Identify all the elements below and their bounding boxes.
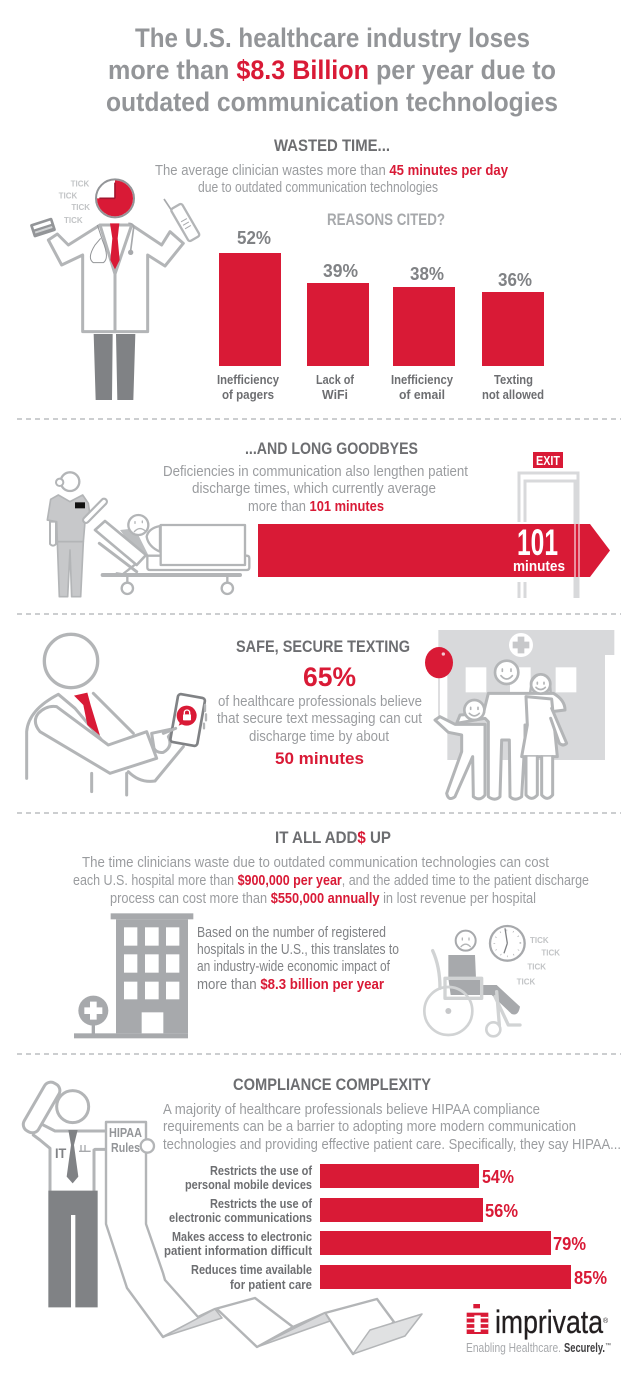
text block: wasted time intro: The average clinician wastes more than 45 minutes per day <box>155 162 509 179</box>
text block: secure messaging: that secure text messaging can cut <box>217 710 423 727</box>
bar chart: reasons cited: Lack of <box>316 373 355 387</box>
title: more than $8.3 Billion per year due to <box>108 55 556 85</box>
bar chart: reasons cited: 36% <box>498 270 532 290</box>
text block: industry-wide impact <box>197 925 399 993</box>
icon: folded hipaa rules paper <box>106 1122 422 1354</box>
text block: secure messaging <box>217 693 423 768</box>
bar chart: reasons cited: 39% <box>323 261 358 281</box>
panel: safe secure texting <box>27 630 614 799</box>
bar chart: reasons cited <box>217 228 544 402</box>
logo: imprivata: ™ <box>605 1342 611 1349</box>
bar chart: reasons cited: of pagers <box>222 388 274 402</box>
logo: imprivata: Enabling Healthcare. <box>466 1340 561 1355</box>
logo: imprivata: imprivata <box>495 1304 603 1340</box>
text block: industry-wide impact: Based on the number of registered <box>197 925 386 941</box>
bar chart: reasons cited: Texting <box>494 373 533 387</box>
title <box>106 23 558 117</box>
icon: folded hipaa rules paper: Rules <box>111 1140 140 1155</box>
text block: hospital costs <box>73 854 589 907</box>
text block: wasted time intro: due to outdated communication technologies <box>198 179 438 196</box>
icon: doctor with clock head <box>30 179 200 400</box>
bar chart: hipaa effects: for patient care <box>230 1278 312 1292</box>
bar chart: hipaa effects: electronic communications <box>169 1211 312 1225</box>
text block: discharge times: more than 101 minutes <box>248 498 384 515</box>
heading: wasted time: WASTED TIME... <box>274 136 390 155</box>
icon: doctor with clock head: TICK <box>71 179 90 188</box>
heading: reasons cited: REASONS CITED? <box>327 210 445 229</box>
text block: discharge times: discharge times, which currently average <box>192 480 436 497</box>
bar chart: reasons cited: Inefficiency <box>217 373 279 387</box>
logo: imprivata: Securely. <box>564 1340 605 1355</box>
text block: secure messaging: 50 minutes <box>275 749 364 768</box>
text block: industry-wide impact: hospitals in the U.S., this translates to <box>197 942 399 958</box>
text block: hospital costs: process can cost more than $550,000 annually in lost revenue per hospital <box>110 890 536 907</box>
text block: hipaa barrier <box>163 1101 621 1153</box>
icon: hospital building <box>74 913 193 1038</box>
text block: discharge times: Deficiencies in communication also lengthen patient <box>163 463 469 480</box>
icon: exit door <box>519 452 578 598</box>
stat: 65%: 65% <box>303 662 356 692</box>
icon: doctor with clock head: TICK <box>59 191 78 200</box>
text block: discharge times <box>163 463 469 515</box>
panel: it all adds up <box>73 828 589 1038</box>
bar chart: reasons cited: Inefficiency <box>391 373 453 387</box>
text block: secure messaging: of healthcare professionals believe <box>218 693 422 710</box>
text block: hospital costs: The time clinicians waste due to outdated communication technologies can cost <box>82 854 550 871</box>
bar chart: reasons cited: of email <box>399 388 445 402</box>
arrow: 101 minutes <box>258 522 610 577</box>
text block: wasted time intro <box>155 162 509 196</box>
bar chart: hipaa effects: Makes access to electronic <box>172 1230 312 1244</box>
title: outdated communication technologies <box>106 87 558 117</box>
icon: patient waiting in wheelchair <box>424 926 560 1036</box>
heading: compliance complexity: COMPLIANCE COMPLEXITY <box>233 1075 432 1094</box>
bar chart: hipaa effects: 56% <box>485 1201 518 1221</box>
logo: imprivata <box>466 1304 611 1355</box>
text block: secure messaging: discharge time by about <box>249 728 390 745</box>
icon: clinician using secure phone <box>27 634 206 795</box>
icon: IT worker scratching head: IT <box>55 1145 67 1161</box>
icon: patient waiting in wheelchair: TICK <box>517 977 536 986</box>
bar chart: hipaa effects <box>164 1164 607 1292</box>
text block: hospital costs: each U.S. hospital more than $900,000 per year, and the added time to the patient discharge <box>73 872 589 889</box>
text block: hipaa barrier: A majority of healthcare professionals believe HIPAA compliance <box>163 1101 540 1118</box>
icon: exit door: EXIT <box>536 454 560 468</box>
icon: folded hipaa rules paper: HIPAA <box>109 1125 143 1140</box>
text block: hipaa barrier: requirements can be a barrier to adopting more modern communication <box>163 1118 576 1135</box>
icon: patient waiting in wheelchair: TICK <box>541 949 560 958</box>
icon: IT worker scratching head <box>21 1079 154 1307</box>
bar chart: hipaa effects: Reduces time available <box>191 1263 312 1277</box>
bar chart: hipaa effects: 79% <box>553 1234 586 1254</box>
icon: logo mark <box>467 1304 488 1334</box>
panel: wasted time <box>30 136 544 402</box>
bar chart: hipaa effects: Restricts the use of <box>210 1164 313 1178</box>
bar chart: hipaa effects: personal mobile devices <box>185 1178 312 1192</box>
bar chart: hipaa effects: 54% <box>482 1167 514 1187</box>
icon: patient waiting in wheelchair: TICK <box>530 936 549 945</box>
panel: compliance complexity <box>21 1075 621 1354</box>
text block: industry-wide impact: more than $8.3 billion per year <box>197 977 384 993</box>
bar chart: reasons cited: 38% <box>410 264 444 284</box>
heading: it all adds up: IT ALL ADD$ UP <box>275 828 391 847</box>
title: The U.S. healthcare industry loses <box>135 23 530 53</box>
bar chart: hipaa effects: Restricts the use of <box>210 1197 313 1211</box>
bar chart: hipaa effects: 85% <box>574 1268 607 1288</box>
arrow: 101 minutes: 101 <box>517 522 558 563</box>
text block: industry-wide impact: an industry-wide economic impact of <box>197 959 391 975</box>
logo: imprivata: ® <box>603 1317 609 1325</box>
bar chart: reasons cited: not allowed <box>482 388 544 402</box>
icon: patient waiting in wheelchair: TICK <box>527 963 546 972</box>
icon: doctor with clock head: TICK <box>64 216 83 225</box>
bar chart: hipaa effects: patient information difficult <box>164 1244 313 1258</box>
icon: nurse and patient in bed <box>47 472 249 597</box>
bar chart: reasons cited: WiFi <box>322 388 348 402</box>
heading: safe secure texting: SAFE, SECURE TEXTING <box>236 637 410 656</box>
arrow: 101 minutes: minutes <box>513 558 565 575</box>
heading: long goodbyes: ...AND LONG GOODBYES <box>245 439 418 458</box>
icon: doctor with clock head: TICK <box>71 203 90 212</box>
icon: family outside hospital <box>425 630 614 799</box>
panel: long goodbyes <box>47 439 610 598</box>
bar chart: reasons cited: 52% <box>237 228 271 248</box>
